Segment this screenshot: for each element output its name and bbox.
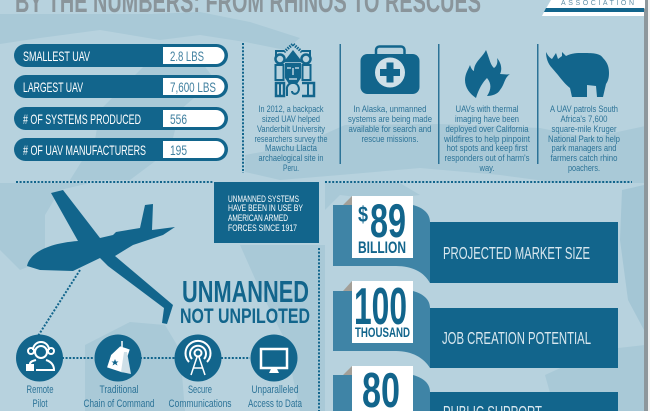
icon: rhino [546, 52, 609, 97]
circle labels: Chain of Command [84, 398, 154, 410]
right page edge shadow [644, 0, 650, 411]
horizontal dotted dividers [16, 182, 632, 411]
text: Kruger rhino patrol: A UAV patrols South [550, 104, 618, 115]
stat ribbon: job creation: 100 [354, 278, 407, 336]
pill: largest UAV [14, 75, 228, 98]
icon: dog tags [94, 334, 142, 382]
circle labels: Access to Data [248, 398, 303, 410]
dotted links between circles [62, 357, 250, 359]
callout: unmanned since 1917: AMERICAN ARMED [228, 213, 288, 224]
heading: unmanned not unpiloted: NOT UNPILOTED [180, 305, 310, 328]
stat ribbon: public support [333, 364, 618, 411]
column dividers [340, 44, 538, 164]
circle labels: Traditional [100, 384, 138, 396]
logo: association banner [542, 0, 645, 16]
stat ribbon: market size [333, 194, 618, 283]
stat ribbon: market size: $ [358, 202, 368, 227]
white outer margin [648, 0, 650, 411]
text: California wildfires: wildfires to help pinpoint [443, 134, 530, 145]
text: Kruger rhino patrol: park managers and [552, 143, 616, 154]
heading: unmanned not unpiloted: UNMANNED [182, 274, 309, 309]
text: California wildfires: deployed over California [446, 124, 529, 135]
circle labels: Secure [188, 384, 212, 396]
circle labels [26, 384, 303, 410]
pill: smallest UAV: SMALLEST UAV [23, 48, 90, 64]
pill: largest UAV: 7,600 LBS [170, 79, 216, 95]
pill: systems produced [14, 107, 228, 130]
text: California wildfires [443, 104, 530, 174]
heading: unmanned not unpiloted [180, 274, 310, 328]
text: Alaska rescue [348, 104, 432, 145]
circle labels: Unparalleled [252, 384, 298, 396]
text: Alaska rescue: In Alaska, unmanned [354, 104, 426, 115]
pill: largest UAV: LARGEST UAV [23, 79, 83, 95]
callout: unmanned since 1917: FORCES SINCE 1917 [228, 223, 297, 234]
text: California wildfires: hot spots and keep first [446, 143, 528, 154]
vertical dotted divider [242, 43, 244, 173]
callout: unmanned since 1917: HAVE BEEN IN USE BY [228, 203, 303, 214]
dotted link plane to pilot [38, 270, 80, 336]
circle labels: Pilot [32, 398, 48, 410]
text: Alaska rescue: available for search and [348, 124, 432, 135]
text: Peru mission: Mawchu Llacta [265, 143, 318, 154]
text: Peru mission: sized UAV helped [262, 114, 320, 125]
icon: flame [465, 50, 510, 98]
logo: association banner: ASSOCIATION [561, 0, 634, 7]
icon: medical kit [360, 46, 420, 94]
pill: UAV manufacturers [14, 138, 228, 161]
text: Kruger rhino patrol: farmers catch rhino [550, 153, 618, 164]
text: Peru mission: In 2012, a backpack [258, 104, 324, 115]
pill: UAV manufacturers: 195 [170, 142, 187, 158]
callout: unmanned since 1917 [214, 182, 319, 243]
icon: monitor [250, 334, 298, 382]
text: California wildfires: UAVs with thermal [456, 104, 518, 115]
text: California wildfires: imaging have been [455, 114, 519, 125]
pill: smallest UAV [14, 44, 228, 67]
icon: radio tower [174, 334, 222, 382]
circle labels: Remote [26, 384, 54, 396]
text: Peru mission [254, 104, 328, 174]
circle labels: Communications [168, 398, 232, 410]
text: Kruger rhino patrol: Africa's 7,600 [560, 114, 608, 125]
stat pills [14, 44, 228, 161]
stat ribbon: job creation: THOUSAND [355, 324, 410, 340]
pill: systems produced: 556 [170, 111, 187, 127]
text: Peru mission: archaelogical site in [258, 153, 324, 164]
icon: Maya mask [276, 44, 314, 96]
stat ribbon: market size: BILLION [358, 239, 406, 257]
text: Kruger rhino patrol: National Park to help [548, 134, 620, 145]
stat ribbon: job creation [333, 278, 618, 368]
text: Peru mission: Peru. [283, 163, 299, 174]
illustration: drone silhouette [27, 190, 175, 324]
text: Kruger rhino patrol [548, 104, 620, 174]
pill: UAV manufacturers: # OF UAV MANUFACTURERS [23, 142, 146, 158]
text: Alaska rescue: systems are being made [348, 114, 432, 125]
text: Kruger rhino patrol: poachers. [568, 163, 600, 174]
pill: smallest UAV: 2.8 LBS [170, 48, 204, 64]
text: California wildfires: responders out of harm's [444, 153, 530, 164]
text: California wildfires: way. [479, 163, 494, 174]
text: Peru mission: Vanderbilt University [257, 124, 325, 135]
stat ribbon: market size: 89 [370, 194, 406, 247]
pill: systems produced: # OF SYSTEMS PRODUCED [23, 111, 141, 127]
icon: remote pilot [16, 334, 63, 382]
text: Peru mission: researchers survey the [254, 134, 328, 145]
text: Kruger rhino patrol: square-mile Kruger [552, 124, 616, 135]
text: Alaska rescue: rescue missions. [362, 134, 418, 145]
callout: unmanned since 1917: UNMANNED SYSTEMS [228, 194, 299, 205]
